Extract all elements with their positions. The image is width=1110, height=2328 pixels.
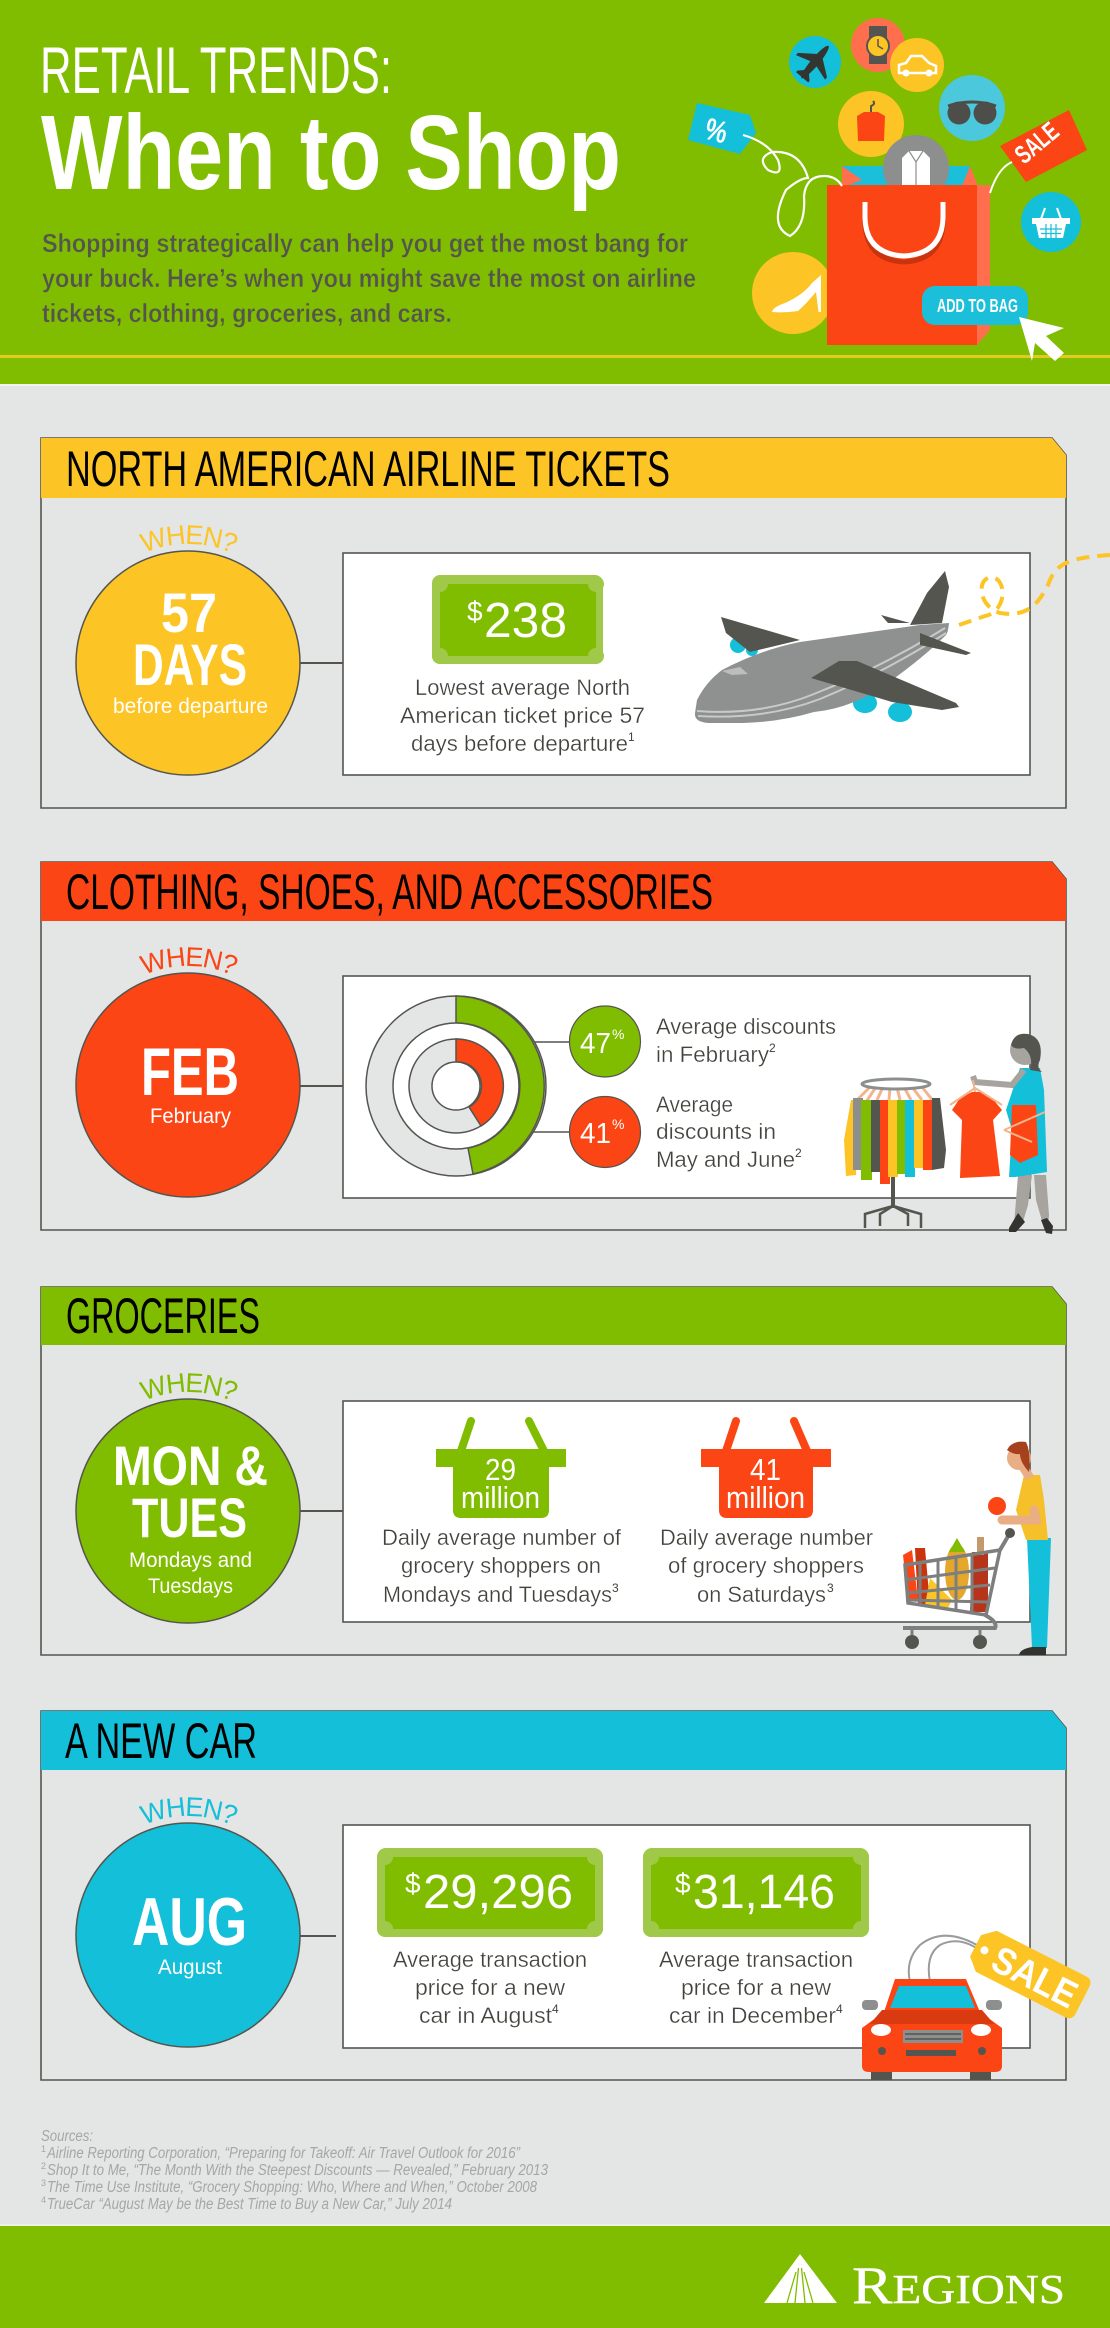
heading: new car: A NEW CAR (65, 1713, 257, 1769)
caption: august: Average transaction (393, 1947, 587, 1972)
intro text: Shopping strategically can help you get the most bang for (42, 228, 688, 258)
sources: Shop It to Me, “The Month With the Steepest Discounts — Revealed,” February 2013 (47, 2162, 548, 2179)
add to bag button (922, 286, 1028, 325)
caption: saturdays: on Saturdays (697, 1582, 826, 1607)
white content box (343, 1401, 1030, 1622)
circle: feb: FEB (141, 1034, 239, 1110)
caption: 41 percent: 2 (795, 1146, 802, 1160)
connector (298, 1935, 336, 1937)
icon: shopping bag illustration (688, 18, 1087, 361)
intro text (42, 228, 696, 328)
circle: aug: August (158, 1956, 222, 1979)
title: RETAIL TRENDS: (40, 33, 392, 107)
heading: groceries (41, 1287, 1066, 1345)
icon: shopping cart (903, 1528, 1015, 1649)
caption: mondays and tuesdays (382, 1525, 622, 1607)
caption: august (393, 1947, 587, 2028)
circle: 57 days: DAYS (133, 633, 247, 698)
icon: man with tomato (988, 1442, 1051, 1655)
price tag: 29,296 (377, 1848, 603, 1937)
icon: orange basket with 41 million (701, 1421, 831, 1518)
stat: 47 percent: % (612, 1026, 624, 1042)
caption: saturdays (660, 1525, 873, 1607)
title: When to Shop (41, 94, 621, 212)
caption: december (659, 1947, 853, 2028)
caption: saturdays: of grocery shoppers (668, 1553, 864, 1578)
footer band (0, 2224, 1110, 2328)
icon: car circle (890, 38, 944, 92)
white content box (343, 553, 1030, 775)
sources: 1 (41, 2144, 46, 2154)
caption: 238: American ticket price 57 (400, 703, 645, 728)
caption: 238 (400, 675, 645, 756)
caption: 238: Lowest average North (415, 675, 630, 700)
caption: 238: days before departure (411, 731, 628, 756)
panel: airline tickets (40, 437, 1110, 809)
circle: 57 days: 57 (161, 581, 217, 644)
icon: top circle (838, 91, 904, 157)
sources: Sources: (41, 2128, 93, 2145)
when label: WHEN? (138, 1373, 238, 1400)
caption: 41 percent (656, 1092, 802, 1172)
icon: shirt circle and bag flaps (842, 135, 978, 201)
caption: mondays and tuesdays: Daily average number of (382, 1525, 622, 1550)
price tag: 31,146 (643, 1848, 869, 1937)
icon: sunglasses circle (939, 75, 1005, 141)
caption: august: 4 (552, 2002, 559, 2016)
circle: 57 days (76, 551, 300, 775)
caption: mondays and tuesdays: grocery shoppers on (401, 1553, 601, 1578)
icon: airplane (695, 571, 971, 723)
price tag: 238: 238 (484, 594, 567, 648)
icon: woman with dress (950, 1034, 1053, 1234)
circle: mon and tues: MON & (113, 1434, 268, 1497)
icon: basket circle (1021, 192, 1081, 252)
donut chart (366, 996, 570, 1176)
icon: sale tag: SALE (1009, 116, 1065, 170)
circle: aug: AUG (132, 1884, 247, 1960)
caption: saturdays: Daily average number (660, 1525, 873, 1550)
caption: 238: 1 (628, 730, 635, 744)
intro text: tickets, clothing, groceries, and cars. (42, 298, 452, 328)
intro text: your buck. Here’s when you might save the most on airline (42, 263, 696, 293)
stat: 47 percent (570, 1006, 640, 1077)
sources: 2 (41, 2161, 46, 2171)
caption: 47 percent: in February (656, 1042, 770, 1067)
circle: mon and tues: Tuesdays (148, 1575, 233, 1598)
caption: 41 percent: May and June (656, 1147, 795, 1172)
icon: red car with sale tag: SALE (985, 1939, 1084, 2017)
caption: saturdays: 3 (827, 1581, 834, 1595)
icon: orange basket with 41 million: million (726, 1480, 805, 1515)
caption: december: 4 (836, 2002, 843, 2016)
caption: 47 percent: Average discounts (656, 1014, 836, 1039)
caption: 47 percent (656, 1014, 836, 1067)
sources: TrueCar “August May be the Best Time to Buy a New Car,” July 2014 (47, 2196, 452, 2213)
caption: mondays and tuesdays: 3 (612, 1581, 619, 1595)
circle: feb: February (150, 1105, 231, 1128)
caption: december: price for a new (681, 1975, 832, 2000)
caption: december: Average transaction (659, 1947, 853, 1972)
icon: airplane circle (787, 34, 843, 90)
header banner (0, 0, 1110, 386)
price tag: 31,146: $ (675, 1868, 691, 1899)
icon: red bag (827, 185, 990, 345)
icon: shoe circle (752, 252, 834, 334)
sources: Airline Reporting Corporation, “Preparing for Takeoff: Air Travel Outlook for 2016” (46, 2145, 521, 2162)
price tag: 238 (432, 575, 604, 664)
icon: orange basket with 41 million: 41 (750, 1452, 781, 1487)
stat: 47 percent: 47 (580, 1028, 611, 1060)
heading: new car (41, 1711, 1066, 1770)
heading: clothing: CLOTHING, SHOES, AND ACCESSORIES (66, 864, 713, 920)
caption: august: car in August (419, 2003, 553, 2028)
white content box (343, 976, 1030, 1198)
icon: clothing rack (844, 1079, 946, 1228)
caption: december: car in December (669, 2003, 837, 2028)
circle: 57 days: before departure (113, 695, 268, 718)
panel: clothing (40, 861, 1067, 1234)
when label: WHEN? (138, 1797, 238, 1824)
flight path (959, 555, 1110, 625)
logo: regions (764, 2254, 1065, 2315)
circle: mon and tues: TUES (132, 1486, 247, 1549)
icon: green basket with 29 million: million (461, 1480, 540, 1515)
price tag: 31,146: 31,146 (693, 1866, 835, 1919)
connector (298, 1510, 344, 1512)
price tag: 29,296: 29,296 (423, 1866, 573, 1919)
connector (298, 1085, 344, 1087)
sources (41, 2128, 548, 2213)
circle: feb (76, 973, 300, 1197)
when label: WHEN? (138, 525, 238, 552)
panel: groceries (40, 1286, 1067, 1656)
circle: mon and tues: Mondays and (129, 1549, 252, 1572)
stat: 41 percent (570, 1096, 640, 1168)
caption: 41 percent: Average (656, 1092, 733, 1117)
sources: 3 (41, 2178, 46, 2188)
stat: 41 percent: 41 (580, 1118, 611, 1150)
stat: 41 percent: % (612, 1116, 624, 1132)
caption: mondays and tuesdays: Mondays and Tuesdays (383, 1582, 612, 1607)
price tag: 238: $ (467, 596, 483, 627)
caption: 47 percent: 2 (769, 1041, 776, 1055)
sources: 4 (41, 2195, 46, 2205)
heading: groceries: GROCERIES (66, 1288, 260, 1344)
icon: red car with sale tag (862, 1925, 1093, 2080)
caption: 41 percent: discounts in (656, 1119, 776, 1144)
add to bag button: ADD TO BAG (937, 296, 1018, 316)
icon: cursor arrow (1019, 317, 1064, 361)
when label: WHEN? (138, 947, 238, 974)
circle: aug (76, 1823, 300, 2047)
caption: august: price for a new (415, 1975, 566, 2000)
icon: sale tag (990, 110, 1087, 193)
icon: green basket with 29 million: 29 (485, 1452, 516, 1487)
logo: regions: REGIONS (852, 2257, 1065, 2315)
icon: green basket with 29 million (436, 1421, 566, 1518)
sources: The Time Use Institute, “Grocery Shopping: Who, Where and When,” October 2008 (47, 2179, 537, 2196)
title (40, 33, 621, 212)
white content box (343, 1825, 1030, 2048)
icon: percent tag: % (701, 111, 731, 150)
connector (298, 662, 344, 664)
panel: new car (40, 1710, 1090, 2081)
price tag: 29,296: $ (405, 1868, 421, 1899)
heading: airline tickets: NORTH AMERICAN AIRLINE TICKETS (66, 441, 670, 497)
icon: percent tag (688, 103, 842, 236)
icon: watch circle (851, 18, 905, 72)
circle: mon and tues (76, 1399, 300, 1623)
